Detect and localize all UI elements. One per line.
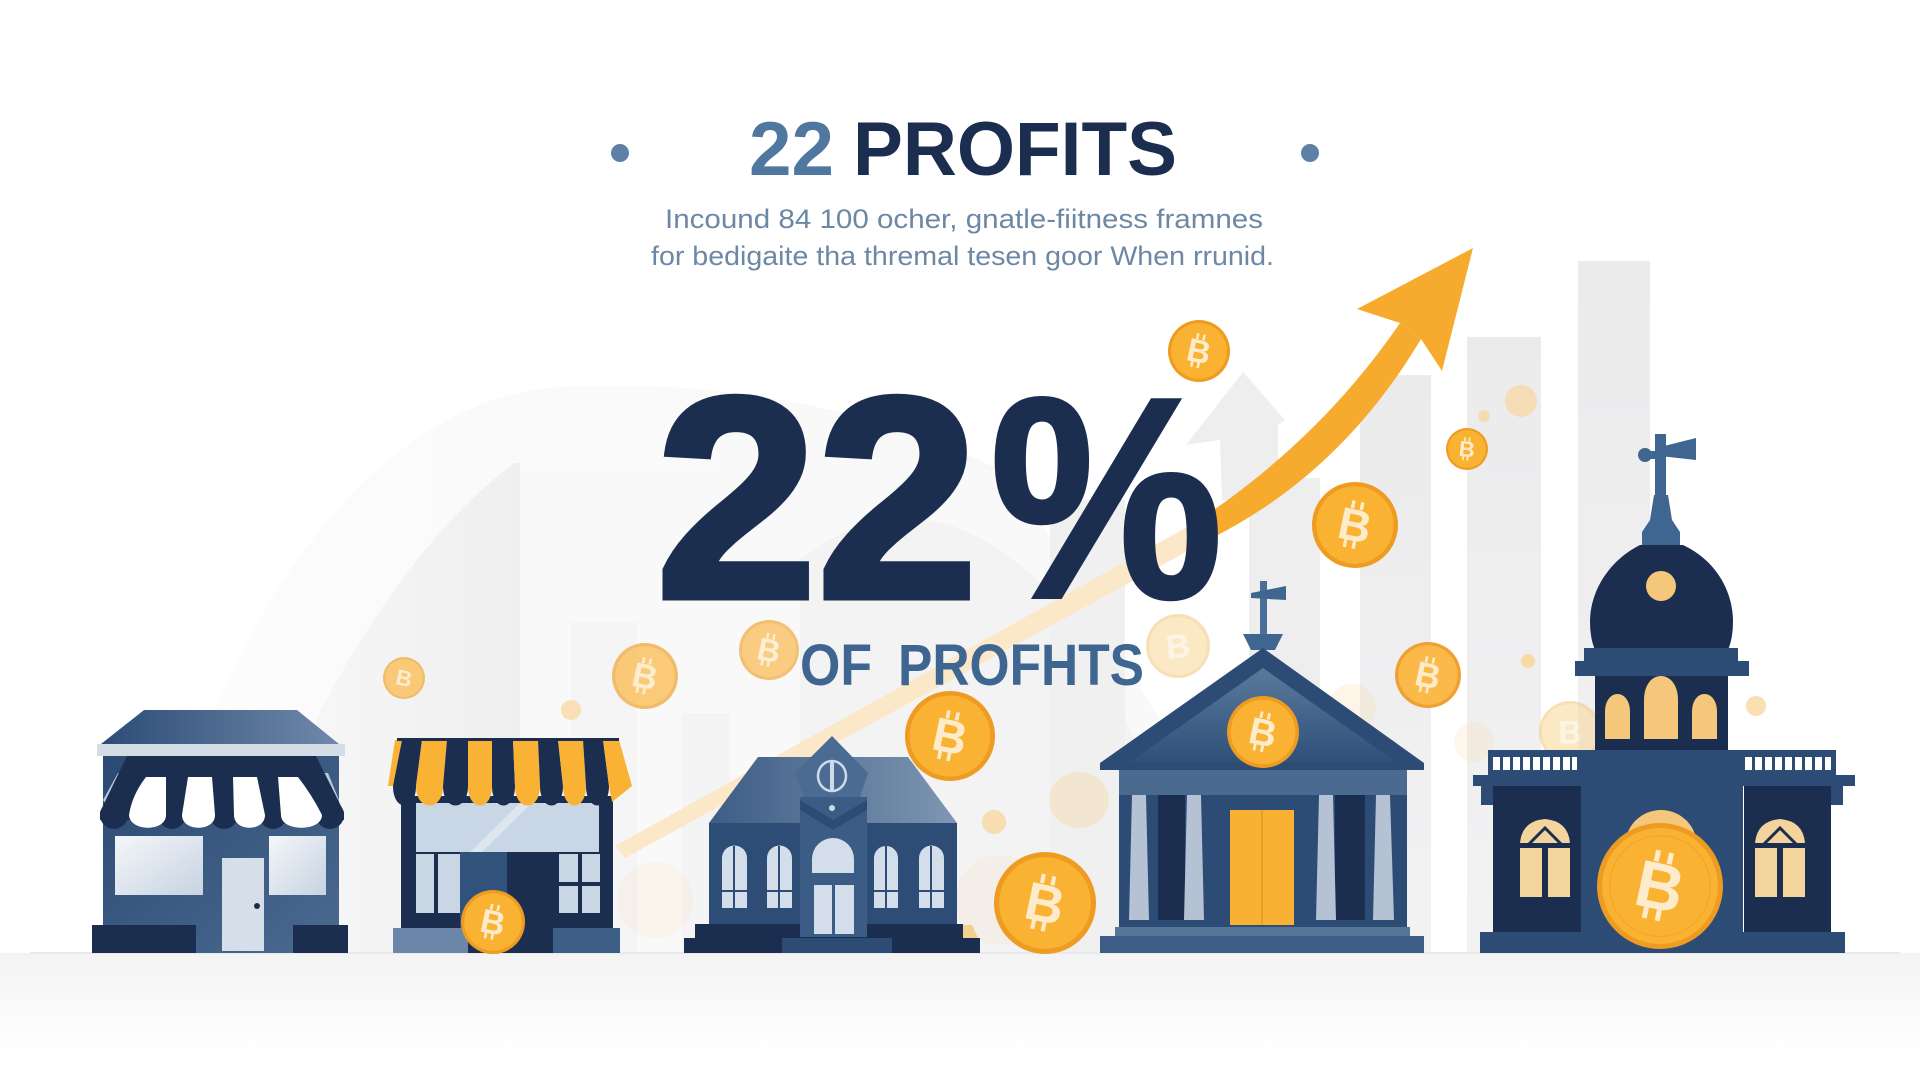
big number 22%: % [990,338,1223,658]
icon: coin at yellow store [461,890,525,954]
icon: coin on bank pediment [1227,696,1299,768]
subtitle text: Incound 84 100 ocher, gnatle-fiitness framnes [665,204,1263,234]
icon: coin left [612,643,678,709]
icon: large coin on ground [994,852,1096,954]
icon: coin above school [905,691,995,781]
icon: coin mid right [1395,642,1461,708]
building: school with tower [684,736,980,953]
floor band [0,952,1920,1072]
big number 22% [656,338,1223,658]
icon: coin at yellow store: B [477,903,508,944]
icon: large coin on capitol: B [1629,846,1691,928]
icon: faded coin behind tower [1539,701,1601,763]
icon: coin left of label [739,620,799,680]
icon: coin top: B [1184,331,1214,372]
faded decorative orange dots [561,385,1766,945]
icon: coin above school: B [928,708,972,767]
building: domed capitol [1473,434,1855,953]
icon: coin small right: B [1458,436,1476,463]
icon: coin right large: B [1334,497,1376,554]
icon: coin far left: B [394,664,414,692]
title: 22 [749,107,834,192]
icon: faded coin near label: B [1164,628,1192,667]
big number 22%: 22 [656,338,978,658]
icon: coin mid right: B [1412,655,1444,697]
icon: large coin on ground: B [1020,871,1070,937]
label: of profhts [800,633,1144,698]
icon: coin on bank pediment: B [1245,710,1280,757]
icon: coin far left [383,657,425,699]
icon: coin left of label: B [754,630,784,670]
title: PROFITS [853,107,1177,192]
label: of profhts: PROFHTS [898,633,1144,698]
building: store with dark awning [92,710,348,953]
icon: faded coin near label [1146,614,1210,678]
subtitle text [651,204,1274,271]
icon: coin small right [1446,428,1488,470]
label: of profhts: OF [800,633,872,698]
icon: coin top [1168,320,1230,382]
building: store with yellow awning [388,738,632,953]
icon: large coin on capitol [1597,823,1723,949]
icon: faded coin behind tower: B [1558,714,1582,750]
icon: coin right large [1312,482,1398,568]
subtitle text: for bedigaite tha thremal tesen goor When rrunid. [651,241,1274,271]
dots beside title [611,144,1319,162]
arrow: growth arrow with faded tail [615,248,1473,858]
building: bank with columns [1100,581,1424,953]
icon: coin left: B [629,656,661,698]
